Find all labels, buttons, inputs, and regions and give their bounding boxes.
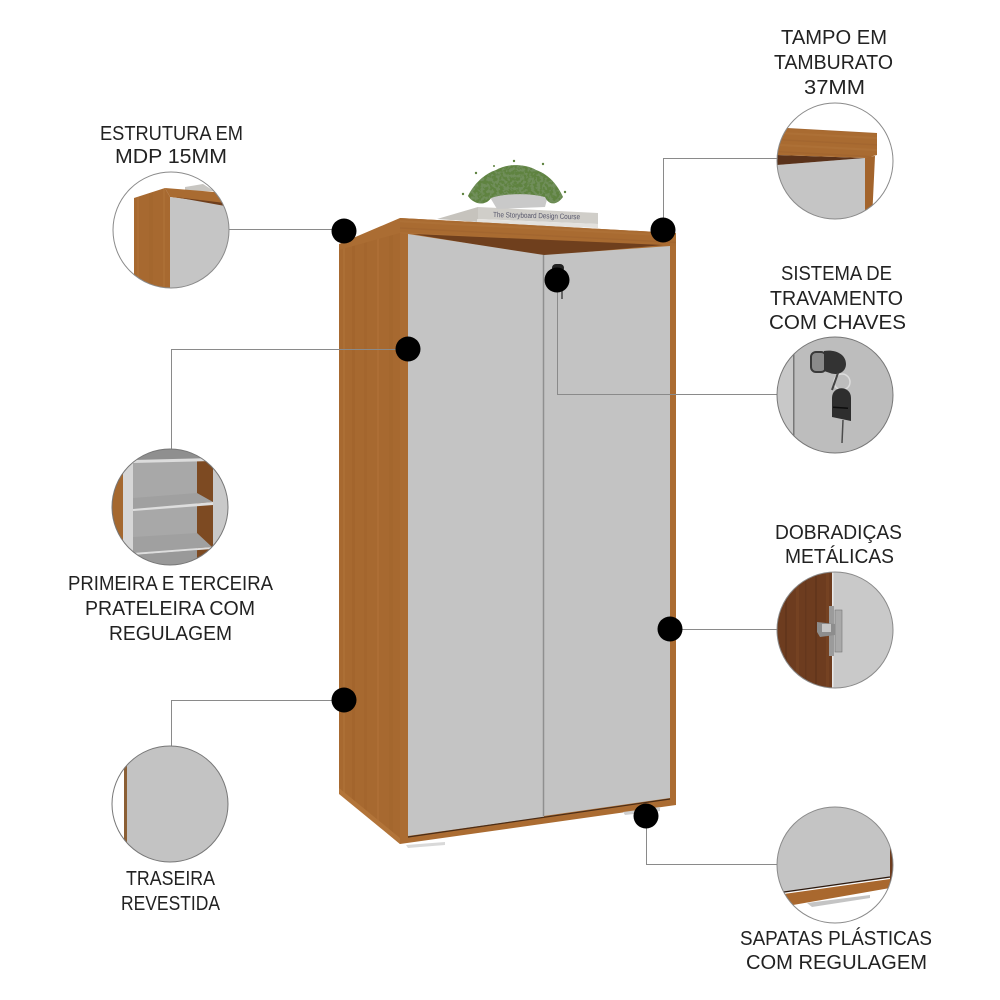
heading: prateleiras <box>68 573 274 645</box>
dark interior gap <box>413 234 663 256</box>
books and plant on top of cabinet <box>437 160 598 228</box>
heading: sistema de travamento <box>769 263 906 334</box>
heading: prateleiras: REGULAGEM <box>109 623 232 645</box>
heading: dobradicas metalicas <box>775 522 902 568</box>
heading: prateleiras: PRIMEIRA E TERCEIRA <box>68 573 274 595</box>
cabinet <box>339 218 676 848</box>
dot: dobradicas <box>658 616 682 642</box>
key in the door lock <box>552 264 564 299</box>
heading: dobradicas metalicas: METÁLICAS <box>785 545 894 568</box>
detail circle: prateleiras <box>112 449 228 565</box>
line: sapatas <box>646 816 778 864</box>
foot right <box>623 807 660 815</box>
line: dobradicas <box>670 628 778 630</box>
line: traseira <box>172 700 344 746</box>
detail circle: traseira revestida <box>112 746 228 862</box>
front frame <box>400 218 676 844</box>
dot: traseira <box>332 688 356 712</box>
leader lines <box>172 158 778 864</box>
dot: sapatas <box>634 804 658 828</box>
line: tampo <box>664 158 778 230</box>
left door <box>408 234 544 836</box>
line: estrutura <box>229 228 344 230</box>
heading: tampo em tamburato <box>774 27 893 99</box>
dot: prateleira <box>396 336 420 362</box>
heading: traseira revestida: REVESTIDA <box>121 893 221 915</box>
side panel <box>339 230 400 844</box>
dot: tampo <box>650 218 676 242</box>
heading: traseira revestida <box>121 868 221 915</box>
book title: The Storyboard Design Course <box>493 210 580 221</box>
side top edge <box>339 218 400 250</box>
heading: sapatas plasticas: COM REGULAGEM <box>746 952 927 974</box>
plant pot <box>488 192 549 209</box>
heading: tampo em tamburato: TAMPO EM <box>781 27 887 49</box>
heading: estrutura em MDP: ESTRUTURA EM <box>100 123 243 145</box>
plinth shadow line <box>408 799 670 837</box>
plant <box>462 160 566 203</box>
heading: dobradicas metalicas: DOBRADIÇAS <box>775 522 902 544</box>
door gap <box>542 255 544 816</box>
foot left <box>406 842 445 848</box>
heading: sistema de travamento: TRAVAMENTO <box>770 288 903 310</box>
book stack <box>437 207 598 228</box>
dot: travamento <box>544 268 570 292</box>
line: prateleira <box>172 350 408 449</box>
heading: prateleiras: PRATELEIRA COM <box>85 598 255 620</box>
marker dots <box>332 218 682 828</box>
icon: hinge <box>817 606 842 656</box>
heading: estrutura em MDP: MDP 15MM <box>115 146 227 168</box>
right door <box>544 246 670 816</box>
heading: sistema de travamento: COM CHAVES <box>769 312 906 334</box>
heading: tampo em tamburato: 37MM <box>804 77 865 99</box>
detail circle: sapatas <box>777 807 893 923</box>
icon: key <box>832 388 851 443</box>
heading: sapatas plasticas: SAPATAS PLÁSTICAS <box>740 927 932 950</box>
detail circle: lock and key <box>777 337 893 453</box>
heading: tampo em tamburato: TAMBURATO <box>774 52 893 74</box>
lower side edge <box>339 788 400 844</box>
heading: traseira revestida: TRASEIRA <box>126 868 216 890</box>
detail circle: tampo <box>777 103 893 220</box>
icon: lock cylinder <box>811 351 846 390</box>
icon: key ring <box>834 374 850 390</box>
detail circle: estrutura em MDP <box>113 172 229 290</box>
detail circle: dobradicas <box>777 572 893 688</box>
line: travamento <box>558 280 778 394</box>
heading: sistema de travamento: SISTEMA DE <box>781 263 892 285</box>
dot: estrutura <box>332 218 356 244</box>
heading: estrutura em MDP <box>100 123 243 168</box>
top front edge <box>400 218 676 255</box>
heading: sapatas plasticas <box>740 927 932 974</box>
